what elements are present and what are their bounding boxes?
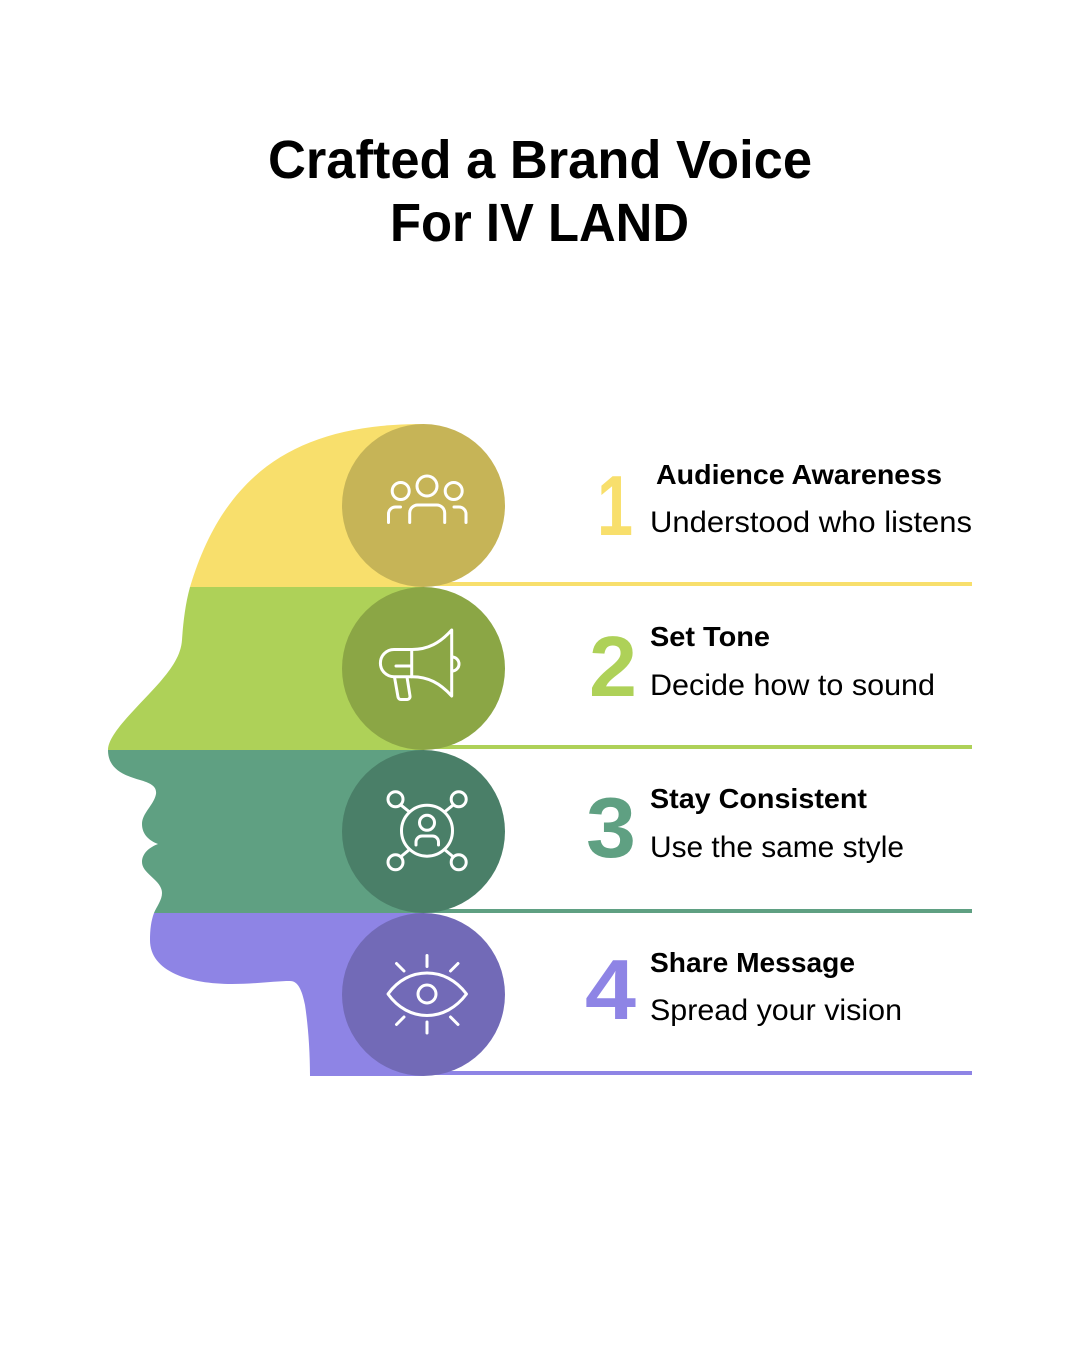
circle: consistency bbox=[342, 750, 505, 913]
circle: audience bbox=[342, 424, 505, 587]
head silhouette bbox=[108, 424, 423, 1076]
item 1 bbox=[597, 459, 972, 554]
divider line 2 bbox=[423, 745, 972, 749]
number 4: 4 bbox=[585, 943, 636, 1038]
item 4 bbox=[585, 943, 902, 1038]
icon: connected person bbox=[388, 792, 466, 870]
head band: teal face bbox=[108, 750, 423, 913]
circle: message bbox=[342, 913, 505, 1076]
item 2 bbox=[589, 620, 935, 715]
divider line 3 bbox=[423, 909, 972, 913]
description: Decide how to sound: Decide how to sound bbox=[650, 669, 935, 702]
heading: Set Tone: Set Tone bbox=[650, 621, 770, 652]
heading: Share Message: Share Message bbox=[650, 947, 855, 978]
heading: Stay Consistent: Stay Consistent bbox=[650, 783, 867, 814]
title bbox=[268, 130, 812, 253]
head band: yellow crown bbox=[190, 424, 423, 587]
head band: green forehead bbox=[108, 587, 423, 750]
title: Crafted a Brand Voice bbox=[268, 130, 812, 190]
icon: people group bbox=[388, 476, 466, 522]
number 1: 1 bbox=[597, 459, 633, 554]
number 2: 2 bbox=[589, 620, 637, 715]
item 3 bbox=[586, 781, 904, 876]
circle: tone bbox=[342, 587, 505, 750]
description: Use the same style: Use the same style bbox=[650, 831, 904, 864]
heading: Audience Awareness: Audience Awareness bbox=[656, 459, 942, 490]
description: Understood who listens: Understood who listens bbox=[650, 506, 972, 539]
head band: purple neck bbox=[150, 913, 423, 1076]
icon: eye bbox=[388, 956, 466, 1033]
icon: megaphone bbox=[380, 630, 459, 700]
title: For IV LAND bbox=[390, 193, 689, 253]
number 3: 3 bbox=[586, 781, 636, 876]
description: Spread your vision: Spread your vision bbox=[650, 994, 902, 1027]
divider line 1 bbox=[423, 582, 972, 586]
divider line 4 bbox=[423, 1071, 972, 1075]
